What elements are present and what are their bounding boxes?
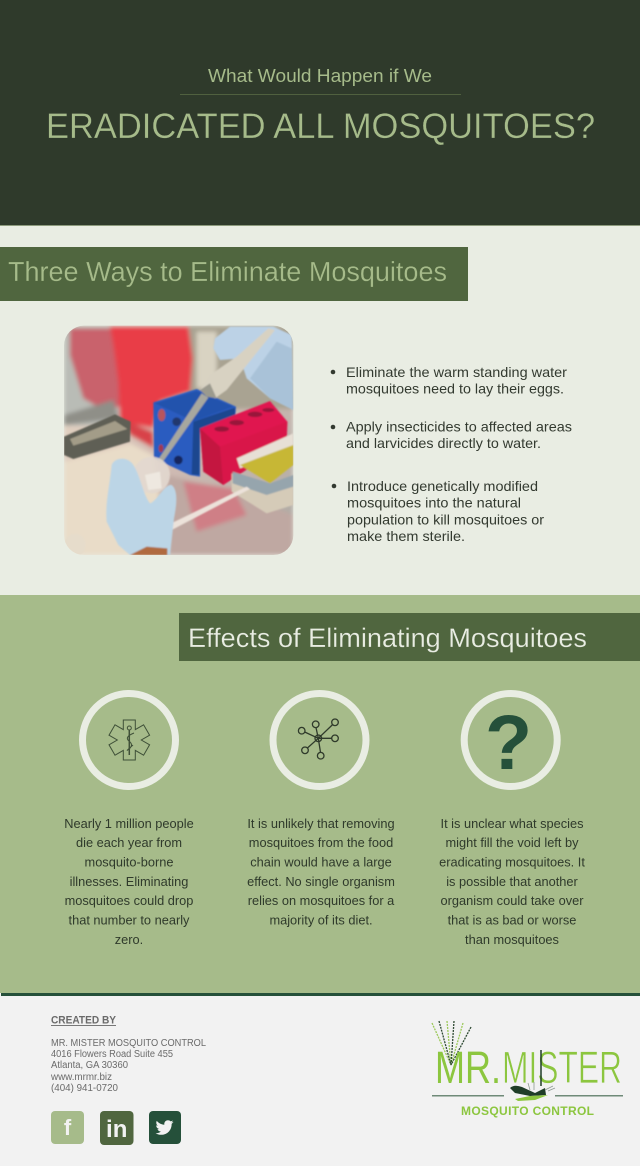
text: food chain effect: effect. No single organism [247, 874, 395, 889]
bullet 1: mosquitoes need to lay their eggs. [346, 380, 564, 396]
bullet 1: Eliminate the warm standing water [346, 364, 567, 380]
bullet 2 [331, 418, 572, 451]
bullet 1 [331, 364, 567, 396]
subtitle: What Would Happen if We [208, 65, 432, 86]
icon: facebook [51, 1111, 84, 1144]
text: unknown species effect: is possible that another [446, 874, 579, 889]
bullet 2: and larvicides directly to water. [346, 435, 541, 451]
text: unknown species effect [439, 816, 585, 947]
text: food chain effect: relies on mosquitoes for a [248, 893, 395, 908]
footer panel [0, 993, 640, 1166]
text: food chain effect: majority of its diet. [269, 912, 373, 928]
icon: linkedin [100, 1111, 134, 1145]
bullet 3: make them sterile. [347, 528, 465, 544]
bullet 3: mosquitoes into the natural [347, 494, 521, 510]
text: health effect [64, 816, 194, 947]
panel: three ways to eliminate mosquitoes [0, 226, 640, 595]
credits: MR. MISTER MOSQUITO CONTROL [51, 1038, 206, 1049]
text: food chain effect: mosquitoes from the food [249, 835, 393, 850]
text: health effect: zero. [115, 932, 143, 947]
logo: Mr. Mister Mosquito Control: MOSQUITO CONTROL [461, 1104, 594, 1118]
logo: Mr. Mister Mosquito Control: MR. [435, 1042, 501, 1093]
icon: star of life in circle [82, 694, 176, 786]
text: unknown species effect: eradicating mosquitoes. It [439, 854, 585, 870]
text: unknown species effect: than mosquitoes [465, 932, 559, 947]
title: ERADICATED ALL MOSQUITOES? [46, 107, 595, 146]
credits: CREATED BY [51, 1014, 117, 1026]
text: unknown species effect: might fill the void left by [445, 835, 579, 850]
section heading bar: Effects of Eliminating Mosquitoes [188, 623, 587, 653]
icon: question mark in circle [464, 694, 557, 786]
text: unknown species effect: organism could take over [441, 893, 584, 908]
text: unknown species effect: that is as bad or worse [448, 912, 576, 928]
icon: network nodes in circle [273, 694, 366, 786]
credits [50, 1014, 206, 1094]
credits: Atlanta, GA 30360 [51, 1060, 128, 1071]
icon: question mark in circle: ? [485, 700, 532, 786]
text: health effect: die each year from [76, 835, 182, 850]
bullet 3: population to kill mosquitoes or [347, 512, 544, 528]
section heading bar [179, 613, 640, 661]
text: food chain effect [247, 816, 395, 928]
bullet list [331, 364, 572, 544]
bullet 2: Apply insecticides to affected areas [346, 418, 572, 434]
icon: linkedin: in [106, 1116, 127, 1143]
text: food chain effect: chain would have a large [250, 854, 392, 870]
credits: 4016 Flowers Road Suite 455 [51, 1049, 173, 1060]
bullet 3 [332, 478, 544, 544]
text: health effect: that number to nearly [69, 912, 190, 928]
bullet 3: Introduce genetically modified [347, 478, 538, 494]
section heading bar: Three Ways to Eliminate Mosquitoes [8, 256, 447, 287]
text: health effect: mosquito-borne [85, 854, 173, 870]
panel: effects of eliminating mosquitoes [0, 595, 640, 993]
text: food chain effect: It is unlikely that removing [247, 816, 395, 831]
credits: www.mrmr.biz [50, 1072, 112, 1083]
logo: Mr. Mister Mosquito Control [432, 1021, 623, 1118]
credits: (404) 941-0720 [51, 1083, 118, 1094]
text: health effect: Nearly 1 million people [64, 816, 194, 831]
text: health effect: illnesses. Eliminating [70, 874, 188, 889]
text: unknown species effect: It is unclear what species [441, 816, 583, 831]
icon: twitter [149, 1111, 181, 1144]
icon: facebook: f [64, 1115, 72, 1140]
photo: lab pipette and test tube racks [64, 326, 293, 556]
text: health effect: mosquitoes could drop [65, 893, 193, 908]
section heading bar [0, 247, 468, 301]
header panel [0, 0, 640, 226]
